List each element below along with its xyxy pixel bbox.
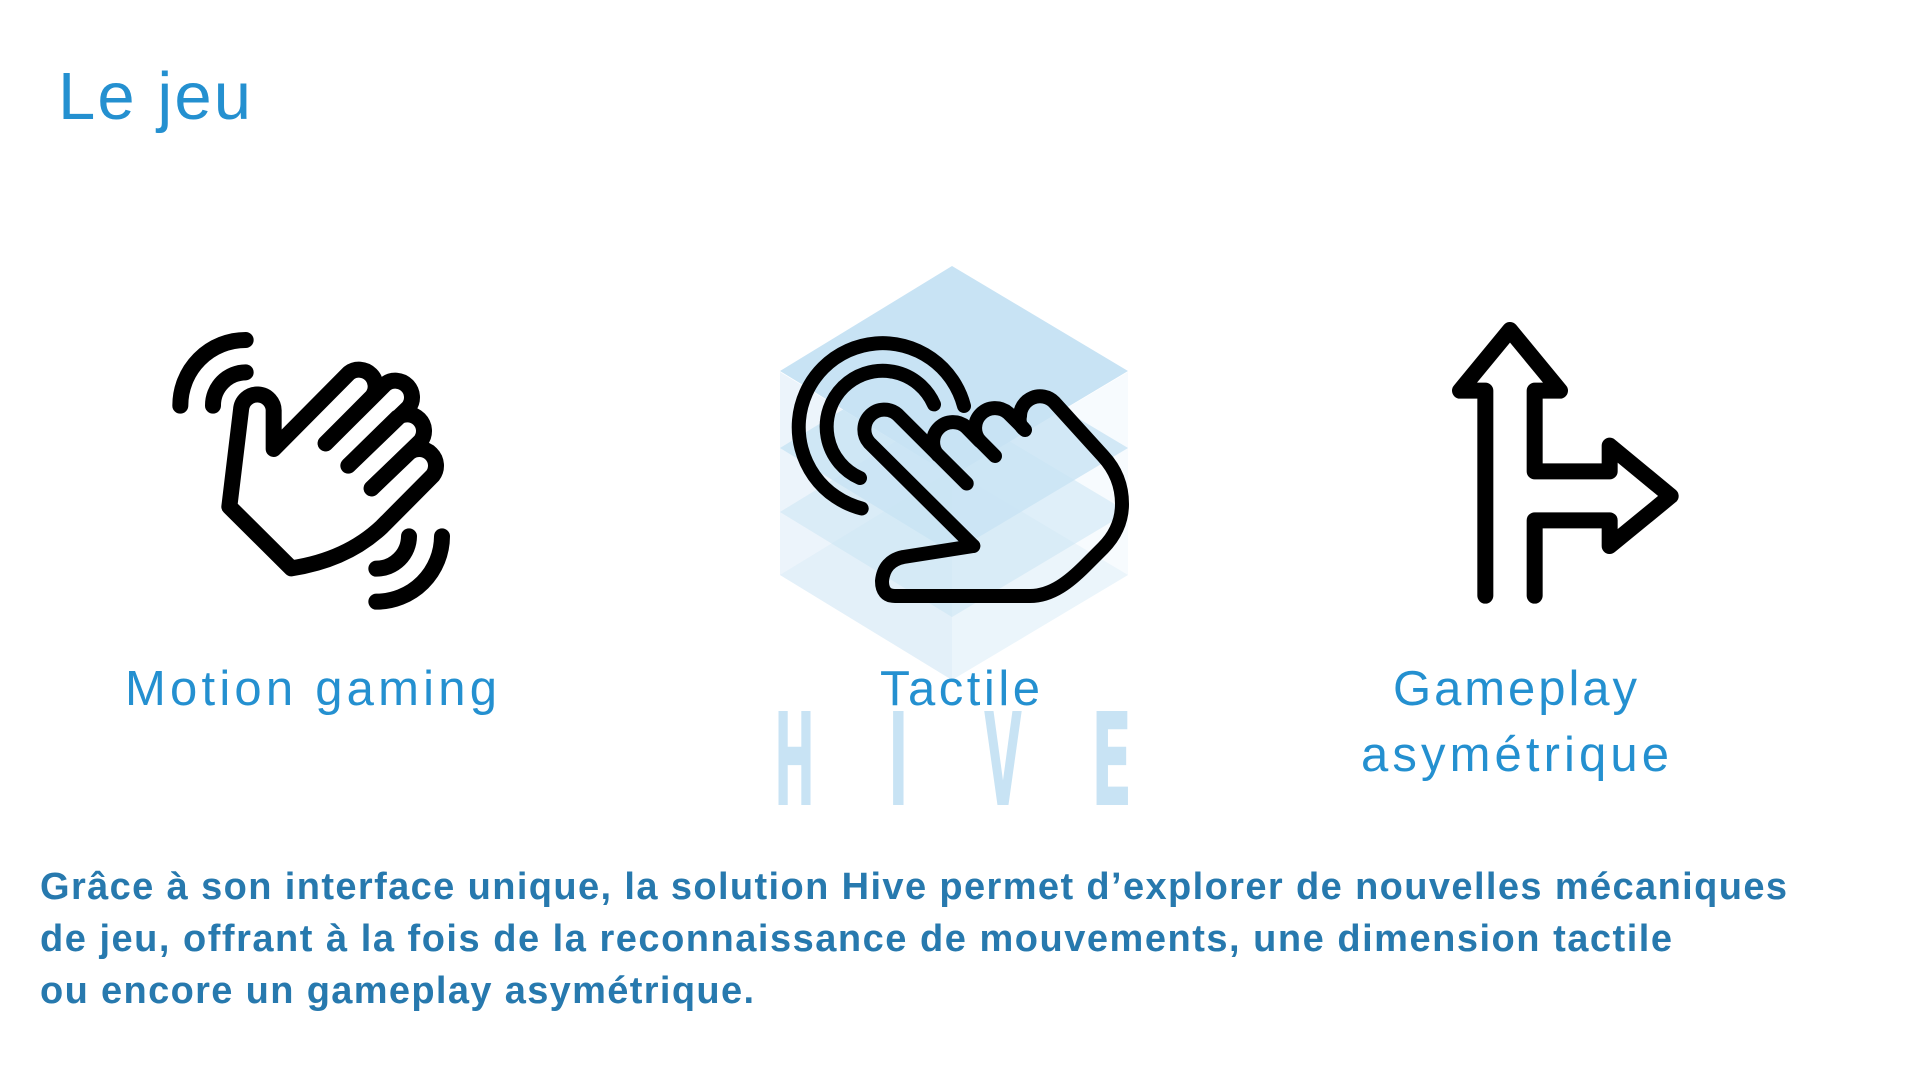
label: gameplay asymétrique: Gameplay xyxy=(1393,662,1638,716)
label: tactile: Tactile xyxy=(880,662,1040,716)
body paragraph xyxy=(40,866,1787,1012)
title: Le jeu xyxy=(58,59,251,134)
body paragraph: de jeu, offrant à la fois de la reconnaissance de mouvements, une dimension tactile xyxy=(40,918,1672,960)
logo wordmark: HIVE xyxy=(774,685,1132,837)
logo wordmark: HIVE: H xyxy=(774,686,815,837)
label: motion gaming: Motion gaming xyxy=(125,662,497,716)
icon: touch gesture (tactile) xyxy=(799,343,1122,596)
logo wordmark: HIVE: E xyxy=(1091,685,1132,836)
label: gameplay asymétrique: asymétrique xyxy=(1361,728,1669,782)
icon: splitting arrows (asymmetric gameplay) xyxy=(1460,330,1671,596)
body paragraph: Grâce à son interface unique, la solution Hive permet d’explorer de nouvelles mécaniques xyxy=(40,866,1787,908)
logo wordmark: HIVE: I xyxy=(888,687,909,836)
logo: Hive hexagon xyxy=(780,266,1128,680)
label: gameplay asymétrique xyxy=(1361,662,1669,782)
logo wordmark: HIVE: V xyxy=(984,686,1022,837)
body paragraph: ou encore un gameplay asymétrique. xyxy=(40,970,754,1012)
icon: waving hand (motion gaming) xyxy=(180,340,442,602)
